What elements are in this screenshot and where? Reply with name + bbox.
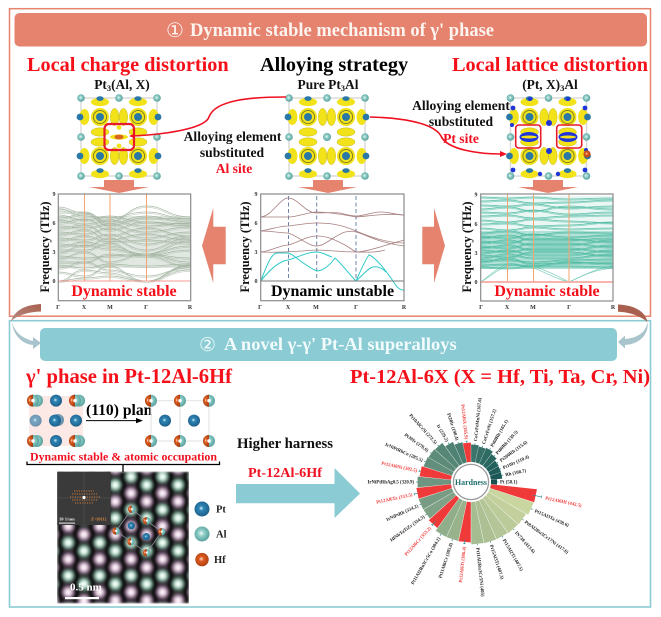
chart: phonon bands right: Frequency (THz) bbox=[460, 202, 474, 292]
chart: phonon bands middle: Γ bbox=[354, 305, 358, 311]
chart: phonon bands middle: 6 bbox=[254, 221, 258, 227]
chart: phonon bands middle: R bbox=[402, 305, 407, 311]
chart: phonon bands middle: Dynamic unstable bbox=[271, 283, 394, 300]
arrow: big teal arrow bbox=[236, 468, 360, 518]
bar labels: Pt200Rh (115.6) bbox=[499, 440, 529, 464]
bar labels: IrNiPtRh (334.2) bbox=[386, 504, 420, 523]
chart: phonon bands middle: 9 bbox=[254, 192, 258, 198]
chart: phonon bands left: 9 bbox=[52, 192, 56, 198]
arrow: down left bbox=[89, 180, 149, 193]
legend: atoms: Hf bbox=[214, 555, 226, 566]
bar labels: CoCrFeMnNi (167.6) bbox=[474, 397, 483, 442]
bar labels: Rh (108.7) bbox=[505, 469, 527, 478]
text: higher hardness: Higher harness bbox=[237, 436, 333, 452]
bar labels: IN738 (413.6) bbox=[513, 531, 536, 555]
chart: phonon bands left: 6 bbox=[52, 221, 56, 227]
image: atomic resolution micrograph: 10 1/nm bbox=[59, 517, 75, 522]
icon: charge density crystal right bbox=[506, 94, 591, 180]
bar labels: Pt30Ir (278.6) bbox=[403, 433, 429, 454]
label: (Pt, X)3Al: Al bbox=[564, 77, 578, 92]
bar labels: HfNbTaTiZr (334.5) bbox=[390, 515, 427, 543]
heading: local charge distortion: Local charge distortion bbox=[27, 54, 229, 76]
label: Pt3(Al, X): 3 bbox=[107, 83, 111, 93]
text: Al site note: Al site bbox=[216, 161, 252, 176]
chart: phonon bands left: M bbox=[107, 305, 113, 311]
arrow: down middle bbox=[298, 180, 357, 193]
bar labels: Pt10AlCrSi (272.5) bbox=[407, 414, 438, 446]
arrow: curved link left bbox=[11, 304, 41, 349]
heading: alloying strategy: Alloying strategy bbox=[260, 54, 408, 76]
bar labels: Pt11Al2Ru3Cr5Ni (405) bbox=[474, 547, 484, 597]
heading: section 2 banner: ② bbox=[199, 334, 216, 356]
text: Pt site note: Alloying element bbox=[412, 98, 510, 113]
chart: phonon bands right: 9 bbox=[474, 192, 478, 198]
panel: novel Pt-Al superalloys bbox=[10, 321, 650, 607]
chart: phonon bands right: Dynamic stable bbox=[494, 283, 600, 300]
bar labels bbox=[368, 397, 582, 597]
chart: phonon bands right: 3 bbox=[474, 251, 478, 257]
heading: section 1 banner bbox=[14, 13, 647, 46]
image: atomic resolution micrograph bbox=[57, 472, 189, 603]
label: Pt3(Al, X): (Al, X) bbox=[111, 77, 150, 92]
bar labels: Pt11Al2Ru3Cr5Co (384.2) bbox=[411, 536, 442, 586]
image: atomic resolution micrograph: Z=[011] bbox=[91, 517, 107, 522]
chart: phonon bands right: M bbox=[530, 305, 536, 311]
chart: phonon bands left: X bbox=[82, 305, 87, 311]
heading: section 2 banner bbox=[40, 328, 617, 361]
chart: phonon bands middle: M bbox=[313, 305, 319, 311]
label: (Pt, X)3Al: 3 bbox=[560, 83, 564, 93]
bar labels: Pt80Rh (139.5) bbox=[495, 430, 520, 456]
chart: phonon bands middle: 3 bbox=[254, 250, 258, 256]
heading: Pt-12Al-6X series: Pt-12Al-6X (X = Hf, Ti, Ta, Cr, Ni) bbox=[350, 366, 650, 388]
bar labels: Pt15Al2Ti (407.5) bbox=[501, 538, 523, 573]
legend: atoms: Al bbox=[216, 530, 227, 540]
chart: phonon bands right: Γ bbox=[567, 305, 571, 311]
bar labels: Pt12Al6Ni (302.5) bbox=[381, 462, 418, 474]
chart: circular hardness bars bbox=[368, 397, 582, 597]
panel: dynamic stable mechanism bbox=[10, 9, 650, 316]
arrow: Al site substitution bbox=[129, 97, 286, 138]
label: Pure Pt3Al: 3 bbox=[341, 83, 345, 93]
bar labels: Pt12Al6Cr (353.2) bbox=[404, 526, 433, 557]
label: Pure Pt3Al: Pure Pt bbox=[298, 77, 341, 92]
arrow: Pt site substitution bbox=[370, 117, 507, 157]
chart: phonon bands left: Dynamic stable bbox=[71, 283, 177, 300]
bar labels: Pt12Al6Ti (386.4) bbox=[459, 546, 468, 583]
chart: phonon bands right: 0 bbox=[474, 280, 478, 286]
bar labels: Pt20Ir (198.4) bbox=[445, 413, 459, 442]
label: (Pt, X)3Al: (Pt, X) bbox=[522, 77, 560, 92]
chart: phonon bands left bbox=[38, 192, 193, 311]
text: Pt site note: substituted bbox=[429, 114, 494, 129]
chart: phonon bands right: X bbox=[505, 305, 510, 311]
chart: phonon bands middle bbox=[238, 192, 407, 311]
bar labels: IrNiPtRhAg0.5 (320.9) bbox=[368, 481, 414, 486]
chart: phonon bands left: 0 bbox=[52, 279, 56, 285]
chart: phonon bands right: Γ bbox=[479, 305, 483, 311]
chart: phonon bands middle: 0 bbox=[254, 279, 258, 285]
chart: phonon bands left: Γ bbox=[56, 305, 60, 311]
arrow: big right arrow bbox=[422, 208, 445, 283]
chart: phonon bands right: 6 bbox=[474, 222, 478, 228]
bar labels: IrNiPtRhCo (285.5) bbox=[384, 443, 424, 464]
text: Al site note: Alloying element bbox=[184, 129, 282, 144]
arrow: 110 plane: (110) plan bbox=[86, 402, 153, 419]
arrow: curved link right bbox=[618, 304, 648, 348]
bar labels: Pt12Al6X (185.9) bbox=[459, 404, 468, 440]
image: atomic resolution micrograph: 0.5 nm bbox=[70, 582, 102, 594]
heading: section 2 banner: A novel γ-γ' Pt-Al superalloys bbox=[224, 334, 457, 354]
bar labels: Pt15Al3Ta (438.6) bbox=[533, 509, 570, 529]
chart: phonon bands right bbox=[460, 192, 616, 311]
icon: charge density crystal middle bbox=[285, 94, 369, 180]
bar labels: CoCrFeNi (157.2) bbox=[482, 408, 498, 445]
heading: local lattice distortion: Local lattice distortion bbox=[452, 54, 648, 76]
label: Pt3(Al, X): Pt bbox=[94, 77, 107, 92]
bar labels: Ir (229.2) bbox=[435, 424, 449, 443]
chart: phonon bands middle: Frequency (THz) bbox=[238, 202, 252, 292]
bar labels: Pt12Al6Ta (333.5) bbox=[376, 493, 413, 506]
bar labels: Pt8Al2Ru3Cr17Ni (417.6) bbox=[523, 520, 569, 556]
heading: section 1 banner: ① bbox=[166, 18, 184, 42]
chart: phonon bands left: Γ bbox=[144, 305, 148, 311]
heading: gamma prime phase: γ' phase in Pt-12Al-6Hf bbox=[25, 364, 233, 388]
chart: phonon bands middle: X bbox=[286, 305, 291, 311]
bracket bbox=[27, 462, 220, 472]
chart: phonon bands left: 3 bbox=[52, 250, 56, 256]
text: Al site note: substituted bbox=[200, 145, 265, 160]
diagram: unit cell with shifted atoms bbox=[27, 395, 85, 447]
bar labels: Pt10Ir (110.4) bbox=[502, 455, 531, 471]
chart: phonon bands middle: Γ bbox=[258, 305, 262, 311]
chart: circular hardness bars: Hardness bbox=[455, 477, 488, 487]
heading: section 1 banner: Dynamic stable mechanism of γ' phase bbox=[190, 21, 494, 41]
bar labels: Pt11Al6Cr (385.8) bbox=[438, 542, 455, 579]
bar labels: Pt15Al3Ti (407.3) bbox=[488, 544, 504, 581]
chart: phonon bands right: R bbox=[611, 305, 616, 311]
chart: phonon bands left: R bbox=[188, 305, 193, 311]
icon: charge density crystal left bbox=[77, 94, 161, 180]
text: Pt site note: Pt site bbox=[443, 131, 479, 146]
arrow: down right bbox=[518, 180, 578, 193]
bar labels: Pt60Rh (165.1) bbox=[490, 419, 510, 448]
text: dynamic stable and atomic occupation: Dynamic stable & atomic occupation bbox=[30, 450, 217, 464]
chart: phonon bands left: Frequency (THz) bbox=[38, 202, 52, 292]
bar labels: Pt12Al6Hf (442.5) bbox=[545, 496, 582, 509]
label: Pure Pt3Al: Al bbox=[345, 77, 359, 92]
arrow: big left arrow bbox=[202, 208, 226, 283]
legend: atoms: Pt bbox=[216, 504, 226, 516]
diagram: 110 plane atoms bbox=[145, 395, 215, 447]
bar labels: Pt (58.1) bbox=[500, 481, 518, 486]
text: Pt-12Al-6Hf: Pt-12Al-6Hf bbox=[248, 466, 322, 481]
legend: atoms bbox=[194, 502, 227, 566]
